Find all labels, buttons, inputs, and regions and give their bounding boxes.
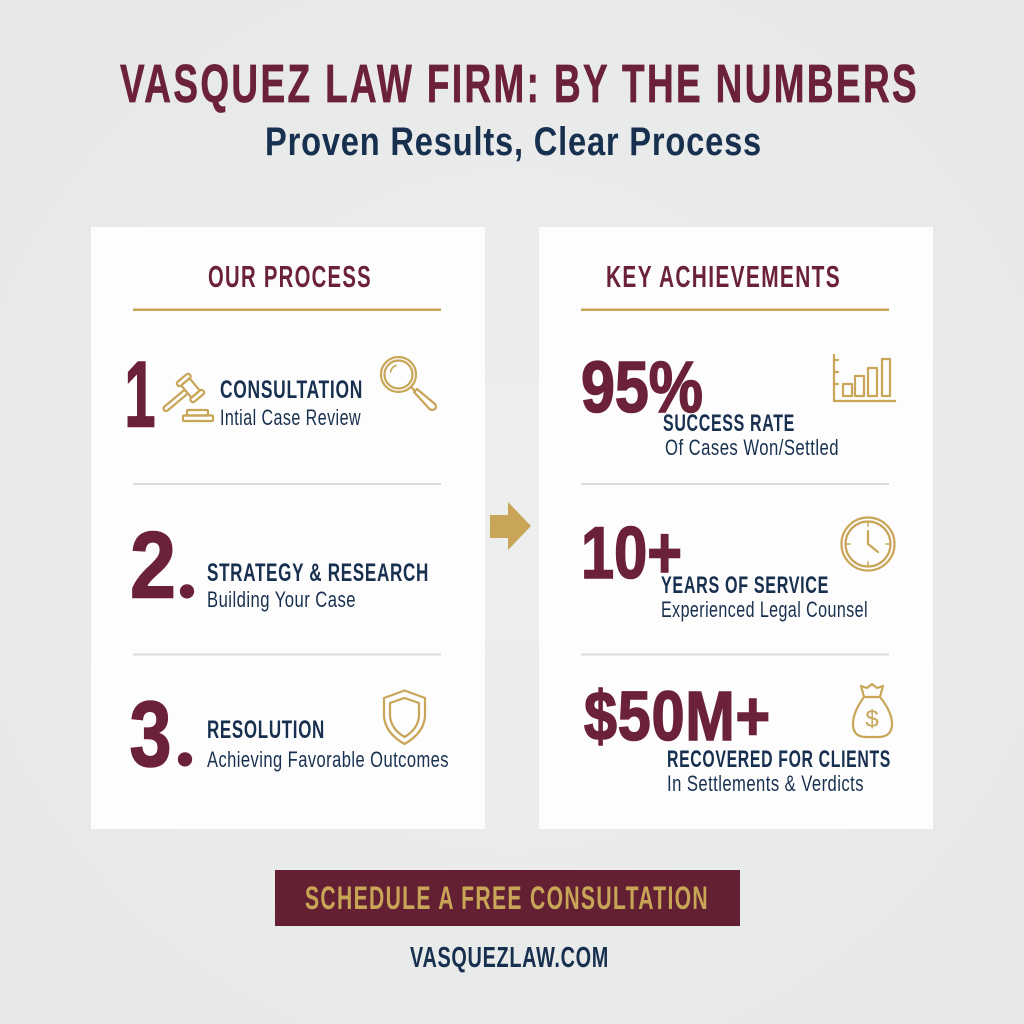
step 2 numeral: 2 [130,512,176,618]
step 1 description: Intial Case Review [220,405,361,430]
website: VASQUEZLAW.COM [410,942,609,974]
icon: bar chart [834,355,895,401]
subtitle: Proven Results, Clear Process [265,120,762,164]
step 3 numeral: . [174,688,196,786]
icon: money bag: $ [865,706,879,733]
stat 2 description: Experienced Legal Counsel [661,597,868,622]
stat 2 title: YEARS OF SERVICE [661,572,829,599]
stat 3 title: RECOVERED FOR CLIENTS [667,746,891,773]
stat: 95%: 95% [581,348,703,428]
step 2 description: Building Your Case [207,587,356,612]
arrow [490,502,531,550]
icon: magnifying glass [381,357,436,410]
heading: our process: OUR PROCESS [208,259,372,294]
icon: money bag [853,684,892,737]
icon: gavel [156,373,213,421]
heading: key achievements: KEY ACHIEVEMENTS [606,259,841,294]
stat 1 description: Of Cases Won/Settled [665,435,839,460]
panel: key achievements [539,227,933,829]
call to action button: SCHEDULE A FREE CONSULTATION [305,880,709,916]
stat: $50M+: $50M+ [584,677,771,755]
step 3 title: RESOLUTION [207,716,325,744]
step 3 numeral: 3 [130,682,172,786]
step 2 title: STRATEGY & RESEARCH [207,559,429,587]
panel: our process [91,227,485,829]
stat 1 title: SUCCESS RATE [663,410,795,437]
step 3 description: Achieving Favorable Outcomes [207,747,449,772]
step 1 title: CONSULTATION [220,376,363,404]
step 1 numeral: 1 [124,342,156,446]
call to action button [275,870,740,926]
icon: clock [842,518,894,570]
icon: shield [384,690,425,744]
stat 3 description: In Settlements & Verdicts [667,771,864,796]
step 2 numeral: . [176,520,198,618]
stat: 10+: 10+ [581,513,682,594]
